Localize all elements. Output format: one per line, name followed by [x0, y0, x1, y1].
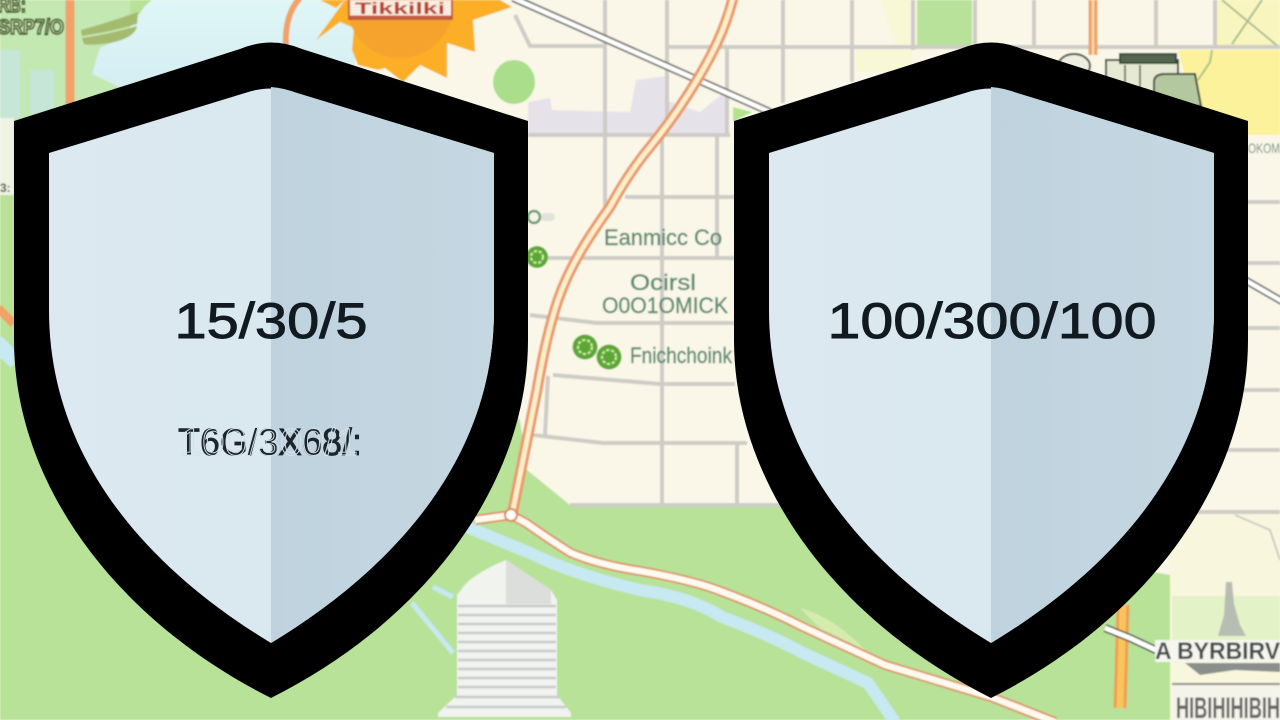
top-left map labels — [0, 0, 64, 39]
top-left pale green tint — [0, 0, 130, 120]
thin green contour lines — [1198, 0, 1280, 80]
pale patch beside south road — [800, 608, 865, 650]
white tower — [438, 560, 571, 717]
top-right building — [1058, 54, 1201, 110]
green map labels: Ocirsl — [630, 270, 696, 295]
pale yellow patches — [856, 0, 913, 72]
bottom-right figure — [1218, 582, 1246, 636]
small green wedge — [733, 107, 752, 122]
top-left map labels: SRP7/O — [0, 16, 64, 39]
green map pins — [526, 211, 622, 370]
icon: sun — [316, 0, 512, 82]
sign on sun — [348, 0, 453, 20]
green map labels: Eanmicc Co — [604, 225, 722, 250]
value: 100/300/100: 100/300/100 — [828, 293, 1156, 349]
green map labels: O0O1OMICK — [602, 293, 728, 318]
roundabout — [505, 509, 517, 521]
left edge label: 3: — [0, 181, 11, 195]
purple district — [528, 76, 727, 133]
green blob — [493, 60, 535, 104]
river — [455, 522, 895, 720]
pale green block — [1172, 596, 1280, 656]
garbled sub-value: 100/300/1 — [180, 422, 358, 464]
left edge label — [0, 118, 14, 195]
street grid — [515, 0, 1280, 560]
green map labels: Fnichchoink — [630, 343, 733, 368]
bluish blocks, top left — [0, 50, 54, 118]
south-east cream block — [1170, 510, 1280, 720]
shield: right — [734, 42, 1248, 698]
white diagonal road — [513, 0, 1280, 303]
green map labels — [602, 225, 733, 368]
garbled sub-value: T6G/3X68/: — [178, 422, 362, 464]
green block — [917, 0, 972, 45]
olive hill icon — [81, 12, 138, 45]
lake — [92, 0, 355, 130]
yellow district — [1178, 50, 1280, 135]
shield: left — [14, 42, 528, 698]
value: 15/30/5: 15/30/5 — [174, 293, 368, 349]
